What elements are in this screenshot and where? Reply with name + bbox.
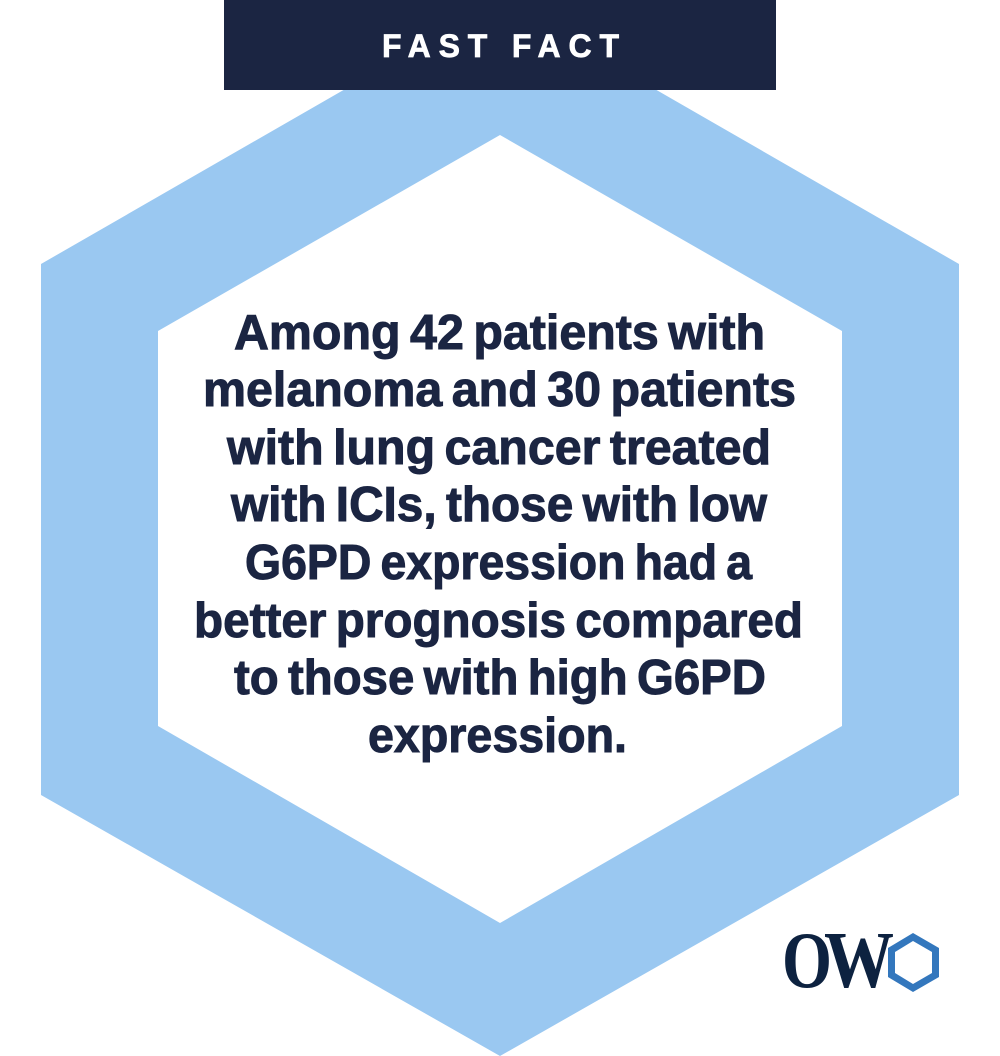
logo xyxy=(782,917,939,1005)
main statement text: with lung cancer treated xyxy=(226,421,771,475)
banner title: FAST FACT xyxy=(382,28,619,64)
main statement text: G6PD expression had a xyxy=(245,536,753,590)
main statement text: expression. xyxy=(368,709,627,763)
logo letter O: O xyxy=(782,917,832,1005)
logo letter W: W xyxy=(824,917,894,1005)
logo hexagon xyxy=(888,933,939,992)
main statement text: melanoma and 30 patients xyxy=(203,363,796,417)
main statement text: Among 42 patients with xyxy=(234,306,765,360)
main statement text: with ICIs, those with low xyxy=(230,478,768,532)
header banner xyxy=(224,0,776,90)
main statement text: better prognosis compared xyxy=(194,594,803,648)
main statement text xyxy=(194,306,803,763)
main statement text: to those with high G6PD xyxy=(234,651,766,705)
